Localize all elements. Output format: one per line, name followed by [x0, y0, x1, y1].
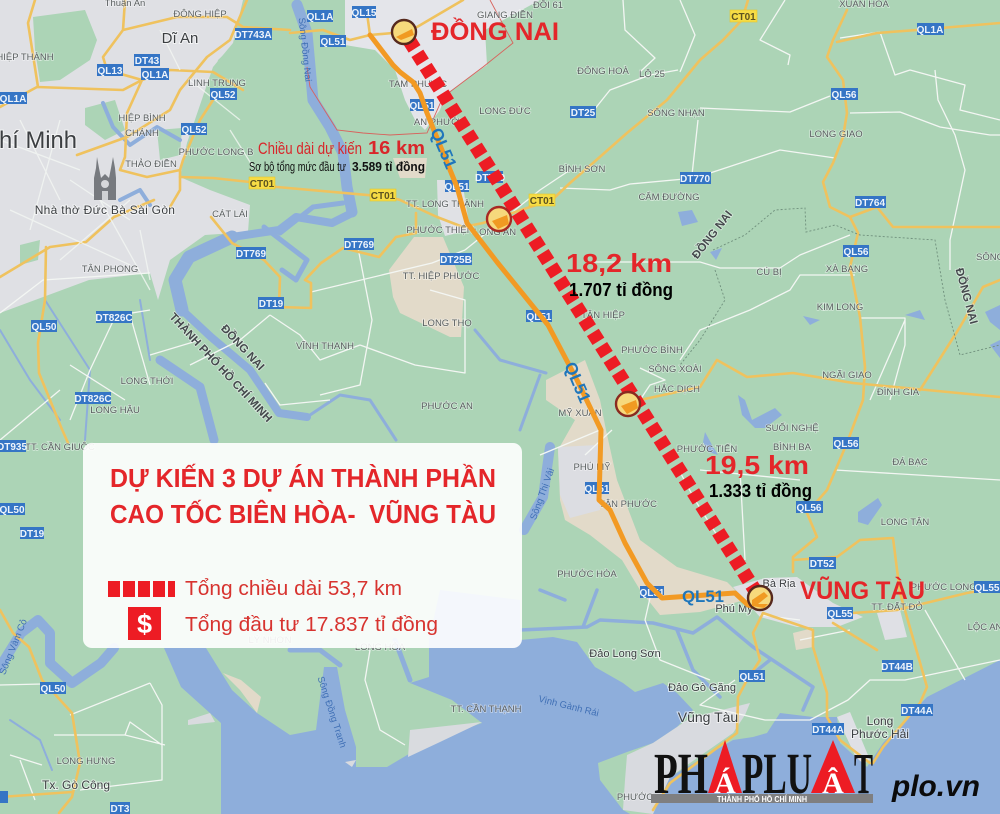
water labels: Sông Đồng Nai	[296, 17, 313, 82]
road shields: blue: DT769	[344, 240, 374, 251]
place labels: PHƯỚC TIẾN	[677, 444, 737, 455]
place labels: LONG HÒA	[355, 642, 406, 653]
marker: Long An junction node	[487, 207, 511, 231]
place labels: ĐÔNG HIỆP	[173, 9, 227, 20]
place labels: PHƯỚC THIỆN	[406, 225, 474, 236]
road shields: blue: DT19	[259, 299, 284, 310]
place labels: TT. LONG THÀNH	[406, 199, 484, 210]
sea and estuaries	[164, 590, 1000, 814]
boundary labels: ĐỒNG NAI	[953, 267, 980, 326]
road shields: blue: QL1A	[0, 94, 26, 105]
place labels: HIỆP BÌNH	[118, 113, 166, 124]
road shields: blue: QL55	[827, 609, 853, 620]
legend text: total length: Tổng chiều dài 53,7 km	[185, 578, 402, 600]
road shields: blue: DT826C	[95, 313, 133, 324]
road shields: blue: QL50	[0, 505, 25, 516]
place labels: ĐÌNH GIA	[877, 387, 920, 398]
place labels: TT. CẦN GIUỘC	[25, 442, 95, 453]
place labels: AN PHƯỚC	[414, 117, 466, 128]
place labels: GIANG ĐIỀN	[477, 10, 533, 21]
place labels: PHƯỚC LONG THỌ	[911, 582, 999, 593]
marker: Bien Hoa start node	[392, 20, 416, 44]
place labels: ĐÔNG HOÀ	[577, 66, 630, 77]
road shields: blue: DT25	[571, 108, 596, 119]
place labels: TT. CẦN THẠNH	[450, 704, 522, 715]
large city labels: Tx. Gò Công	[42, 778, 110, 792]
QL51 road labels: QL51	[426, 125, 460, 172]
road shields: blue: DT44A	[812, 725, 844, 736]
callout: segment 3: 1.333 tỉ đồng	[709, 481, 812, 501]
rivers	[0, 5, 813, 770]
place labels: LONG HƯNG	[57, 756, 115, 767]
Can Thanh shore	[188, 713, 482, 767]
place labels: CÙ BỊ	[756, 267, 782, 278]
place labels: SÔNG XOÀI	[648, 364, 702, 375]
place labels: LONG GIAO	[809, 129, 863, 140]
green parks in the city	[20, 10, 300, 265]
Phu My industrial corridor	[546, 360, 745, 615]
large city labels: Phú Mỹ	[715, 603, 753, 615]
road shields: blue: DT764	[855, 198, 885, 209]
road shields: blue: DT44A	[901, 706, 933, 717]
logo band	[651, 794, 873, 803]
callout: segment 2: 1.707 tỉ đồng	[569, 280, 673, 300]
road shields: yellow CT01: CT01	[371, 191, 396, 202]
road shields: blue: QL52	[181, 125, 207, 136]
site name: plo.vn	[891, 770, 980, 803]
road shields: blue: DT769	[475, 173, 505, 184]
sand zones	[223, 158, 813, 713]
panel: project summary	[83, 443, 522, 648]
callout: segment 2: 18,2 km	[566, 248, 672, 278]
road shields: blue: QL51	[584, 484, 610, 495]
road shields: blue: DT769	[236, 249, 266, 260]
panel background	[83, 443, 522, 648]
boundary labels	[167, 208, 980, 425]
place labels: TÂN HIỆP	[581, 310, 625, 321]
road shields: blue: DT43	[135, 56, 160, 67]
city road grid	[0, 30, 255, 290]
logo black letters: PH	[654, 741, 708, 806]
place labels: SUỐI NGHỆ	[765, 422, 819, 434]
road shields: blue: DT826C	[74, 394, 112, 405]
place labels: LONG HẬU	[90, 405, 140, 416]
panel title: DỰ KIẾN 3 DỰ ÁN THÀNH PHẦN	[110, 463, 496, 493]
large city labels: Nhà thờ Đức Bà Sài Gòn	[35, 203, 175, 217]
large city labels: Phước Hải	[851, 727, 909, 741]
district border	[680, 208, 1000, 365]
place labels: TAM PHƯỚC	[389, 79, 447, 90]
water labels: Vịnh Gành Rái	[537, 694, 600, 719]
place labels: PHƯỚC LONG B	[179, 147, 253, 158]
urban area: Long Thanh	[437, 180, 470, 236]
road shields: blue: DT743A	[234, 30, 272, 41]
place labels: LONG AN	[474, 227, 516, 238]
road shields: blue: DT44B	[881, 662, 913, 673]
logo black letters	[654, 741, 873, 806]
place labels: TT. HIỆP PHƯỚC	[403, 271, 480, 282]
water labels: Sông Đồng Tranh	[315, 675, 348, 749]
road shields: blue: QL51	[320, 37, 346, 48]
place labels: CHÁNH	[125, 128, 159, 139]
place labels: PHƯỚC HÒA	[557, 569, 617, 580]
road shields: blue: QL55	[974, 583, 1000, 594]
boundary labels: ĐỒNG NAI	[689, 208, 735, 262]
place labels: TÂN PHƯỚC	[599, 499, 657, 510]
place labels: BÌNH SƠN	[559, 164, 605, 175]
icon: cathedral landmark	[94, 157, 116, 200]
road shields: blue: DT25B	[440, 255, 472, 266]
provincial border	[307, 0, 513, 135]
road shields: blue: QL15	[351, 8, 377, 19]
road shields: blue: QL51	[444, 182, 470, 193]
place labels: LONG ĐỨC	[479, 106, 531, 117]
legend icon: red dashes	[108, 581, 175, 597]
logo accent letters: Á	[714, 767, 736, 800]
place labels: LONG THỌ	[422, 318, 472, 329]
place labels: TT. ĐẤT ĐỎ	[871, 601, 923, 613]
Ba Ria urban	[733, 577, 907, 766]
road shields: blue: DT52	[810, 559, 835, 570]
road shields: blue: QL51	[409, 101, 435, 112]
road shields: blue: QL52	[210, 90, 236, 101]
place labels: SÔNG NHẠN	[647, 108, 705, 119]
place labels: NGÃI GIAO	[822, 370, 872, 381]
road shields: blue: QL1A	[142, 70, 168, 81]
large city labels: Bà Rịa	[762, 578, 796, 590]
callout: segment 2	[566, 248, 673, 300]
water labels	[0, 17, 600, 749]
large city labels: hí Minh	[0, 127, 77, 154]
QL51 road labels	[426, 125, 724, 606]
place labels: BÌNH BA	[773, 442, 812, 453]
place labels: CẨM ĐƯỜNG	[638, 191, 700, 203]
logo black letters: PLU	[742, 741, 812, 806]
road shields: yellow CT01	[249, 10, 757, 207]
place labels: LONG THỚI	[121, 376, 173, 387]
QL51 road labels: QL51	[682, 587, 724, 606]
place labels: ĐÁ BẠC	[892, 457, 928, 468]
Vung Tau peninsula urban	[623, 703, 750, 814]
boundary labels: ĐỒNG NAI	[218, 322, 267, 373]
urban area: Bien Hoa	[345, 0, 540, 130]
water labels: Sông Thị Vải	[528, 467, 557, 522]
place labels: XÀ BANG	[826, 264, 868, 275]
place labels: THẢO ĐIỀN	[125, 158, 177, 170]
road shields: blue: DT770	[680, 174, 710, 185]
urban area: Ho Chi Minh City	[0, 0, 250, 313]
place labels: PHÚ MỸ	[574, 462, 611, 473]
marker: Hac Dich junction node	[616, 392, 640, 416]
road shields: blue: QL51	[739, 672, 765, 683]
route: existing QL51 highway in orange	[370, 35, 762, 608]
boundary labels: THÀNH PHỐ HỒ CHÍ MINH	[167, 310, 275, 425]
place labels: CÁT LÁI	[212, 209, 248, 220]
road shields: blue: QL51	[639, 588, 665, 599]
road shields: blue: DT19	[20, 529, 45, 540]
Phu My urban	[558, 445, 600, 518]
logo red triangles	[708, 740, 855, 793]
logo accent letters: Ậ	[822, 767, 844, 800]
large city labels: Đảo Long Sơn	[589, 648, 661, 660]
heading: Dong Nai: ĐỒNG NAI	[431, 16, 559, 46]
place labels: VĨNH THANH	[296, 341, 354, 352]
place labels: LỘ 25	[639, 69, 665, 80]
callout: segment 1	[249, 138, 425, 174]
logo accent letters	[714, 767, 844, 800]
callout: segment 1: Chiều dài dự kiến	[258, 139, 362, 158]
marker: Vung Tau end node	[748, 586, 772, 610]
route: planned expressway in red dashes	[409, 40, 756, 592]
road shields: blue: QL56	[831, 90, 857, 101]
place labels: KIM LONG	[817, 302, 863, 313]
callout: segment 1: 3.589 tỉ đồng	[352, 160, 425, 174]
logo: Phap Luat newspaper	[651, 740, 873, 806]
QL51 road labels: QL51	[560, 359, 594, 406]
road shields: blue: QL56	[833, 439, 859, 450]
callout: segment 3	[705, 450, 812, 501]
large city labels: Vũng Tàu	[678, 709, 738, 725]
callout: segment 1: Sơ bộ tổng mức đầu tư	[249, 159, 346, 174]
road shields: yellow CT01: CT01	[250, 179, 275, 190]
road shields: blue: QL56	[843, 247, 869, 258]
panel title: CAO TỐC BIÊN HÒA- VŨNG TÀU	[110, 499, 496, 529]
text: T	[854, 741, 873, 806]
large city labels: Đảo Gò Găng	[668, 682, 736, 694]
road shields: blue: QL13	[97, 66, 123, 77]
callout: segment 1: 16 km	[368, 138, 425, 158]
road shields: blue: QL56	[796, 503, 822, 514]
large city labels: Long	[867, 714, 893, 728]
place labels: MỸ XUÂN	[558, 408, 602, 419]
legend icon: dollar: $	[137, 609, 152, 639]
road shields: yellow CT01: CT01	[530, 196, 555, 207]
road shields: yellow CT01: CT01	[731, 12, 756, 23]
place labels: TÂN PHONG	[82, 264, 138, 275]
place labels: PHƯỚC AN	[421, 401, 473, 412]
road shields: blue: QL1A	[307, 12, 333, 23]
large city labels: Dĩ An	[162, 30, 198, 47]
place labels: HẮC DỊCH	[654, 384, 700, 395]
panel title	[110, 463, 496, 529]
lakes	[678, 210, 1000, 525]
place labels: LINH TRUNG	[188, 78, 246, 89]
road shields: blue: QL50	[31, 322, 57, 333]
road shields: blue: QL50	[40, 684, 66, 695]
road shields: blue: QL1A	[917, 25, 943, 36]
logo tagline: THÀNH PHỐ HỒ CHÍ MINH	[717, 794, 807, 804]
place labels: LÝ NHƠN	[248, 635, 292, 646]
heading: Vung Tau: VŨNG TÀU	[800, 575, 925, 605]
place labels: LONG TÂN	[881, 517, 929, 528]
place labels: PHƯỚC	[617, 792, 653, 803]
legend icon: dollar	[128, 607, 161, 640]
place labels: PHƯỚC BÌNH	[621, 345, 683, 356]
place labels: ĐỒI 61	[533, 0, 563, 11]
road shields: blue: QL51	[526, 312, 552, 323]
legend text: total investment: Tổng đầu tư 17.837 tỉ đồng	[185, 614, 438, 636]
callout: segment 3: 19,5 km	[705, 450, 809, 480]
